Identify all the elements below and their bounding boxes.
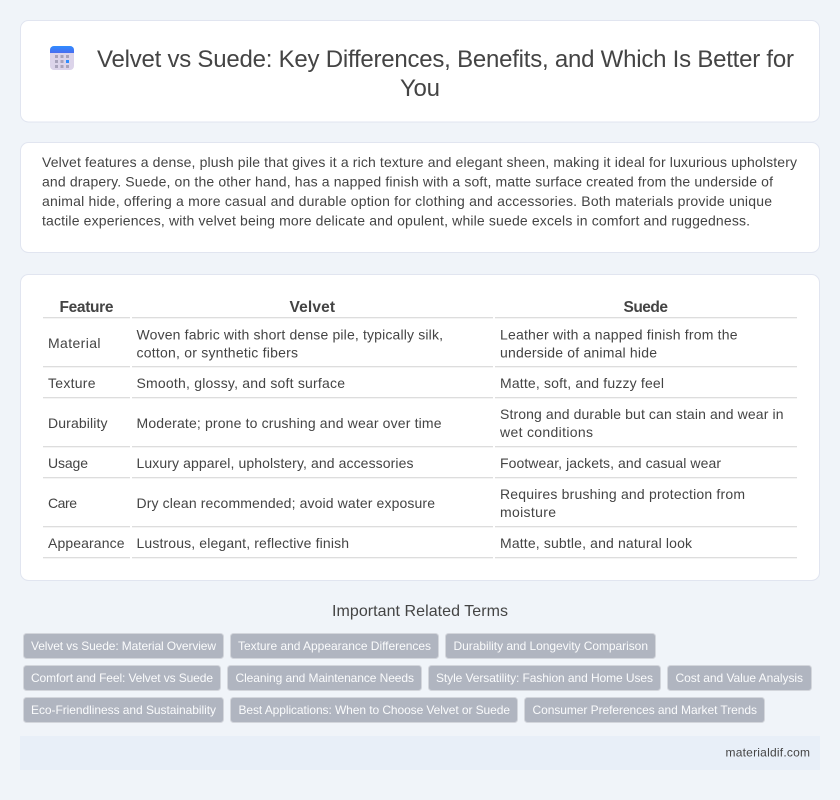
table header: Feature (60, 299, 114, 316)
tag (24, 634, 224, 658)
row: appearance (43, 535, 797, 558)
tag (230, 698, 518, 722)
row: durability: Strong and durable but can stain and wear in (500, 406, 784, 422)
row: material: Leather with a napped finish from the (500, 326, 738, 342)
row: material: Woven fabric with short dense pile, typically silk, (136, 326, 443, 342)
tag (228, 666, 422, 690)
table header: Suede (624, 299, 668, 316)
tag: Comfort and Feel: Velvet vs Suede (31, 671, 213, 685)
tag (446, 634, 656, 658)
tag: Durability and Longevity Comparison (454, 639, 648, 653)
row: texture (43, 375, 797, 398)
tag: Style Versatility: Fashion and Home Uses (436, 671, 653, 685)
row: usage: Usage (48, 455, 88, 471)
text block: description: Velvet features a dense, plush pile that gives it a rich texture and elegant sheen, making it ideal for luxurious upholstery (42, 154, 797, 170)
row: texture: Smooth, glossy, and soft surface (136, 375, 345, 391)
tag (24, 698, 224, 722)
footer: materialdif.com (726, 746, 810, 760)
tag (668, 666, 812, 690)
row: material (43, 326, 797, 367)
related term tags (24, 634, 812, 722)
panel: comparison table (20, 274, 820, 580)
row: appearance: Matte, subtle, and natural look (500, 535, 693, 551)
panel: title card (20, 20, 820, 122)
tag (524, 698, 764, 722)
text block: description (42, 154, 797, 228)
tag: Cleaning and Maintenance Needs (236, 671, 414, 685)
panel: introduction text (20, 142, 820, 252)
tag: Eco-Friendliness and Sustainability (31, 703, 216, 717)
row: durability (43, 406, 797, 447)
table header: Velvet (290, 299, 335, 316)
tag: Consumer Preferences and Market Trends (532, 703, 757, 717)
row: care: Dry clean recommended; avoid water exposure (136, 495, 435, 511)
heading: important related terms: Important Related Terms (332, 603, 508, 620)
row: durability: Moderate; prone to crushing and wear over time (136, 415, 442, 431)
row: texture: Texture (48, 375, 96, 391)
tag: Velvet vs Suede: Material Overview (31, 639, 216, 653)
title (97, 46, 794, 102)
text block: description: animal hide, offering a more casual and durable option for clothing and accessories. Both materials provide unique (42, 193, 772, 209)
icon: calendar (50, 46, 74, 70)
title: You (400, 75, 440, 102)
title: Velvet vs Suede: Key Differences, Benefits, and Which Is Better for (97, 46, 794, 73)
row: appearance: Appearance (48, 535, 125, 551)
row: care (43, 486, 797, 527)
row: care: moisture (500, 504, 556, 520)
row: durability: Durability (48, 415, 108, 431)
row: care: Care (48, 495, 77, 511)
row: material: cotton, or synthetic fibers (136, 344, 298, 360)
row: durability: wet conditions (499, 424, 593, 440)
tag: Texture and Appearance Differences (238, 639, 431, 653)
row: appearance: Lustrous, elegant, reflective finish (136, 535, 349, 551)
tag: Best Applications: When to Choose Velvet or Suede (238, 703, 510, 717)
footer (20, 736, 820, 770)
tag (230, 634, 438, 658)
row: material: underside of animal hide (500, 344, 657, 360)
row: usage: Luxury apparel, upholstery, and accessories (136, 455, 414, 471)
table header (43, 299, 797, 318)
text block: description: and drapery. Suede, on the other hand, has a napped finish with a soft, matte surface created from the underside of (42, 174, 773, 190)
row: material: Material (48, 335, 100, 351)
row: usage (43, 455, 797, 478)
tag (24, 666, 220, 690)
tag (428, 666, 660, 690)
tag: Cost and Value Analysis (676, 671, 803, 685)
row: texture: Matte, soft, and fuzzy feel (500, 375, 664, 391)
row: care: Requires brushing and protection from (500, 486, 745, 502)
text block: description: tactile experiences, with velvet being more delicate and opulent, while suede excels in comfort and ruggedness. (42, 212, 750, 228)
row: usage: Footwear, jackets, and casual wear (500, 455, 721, 471)
